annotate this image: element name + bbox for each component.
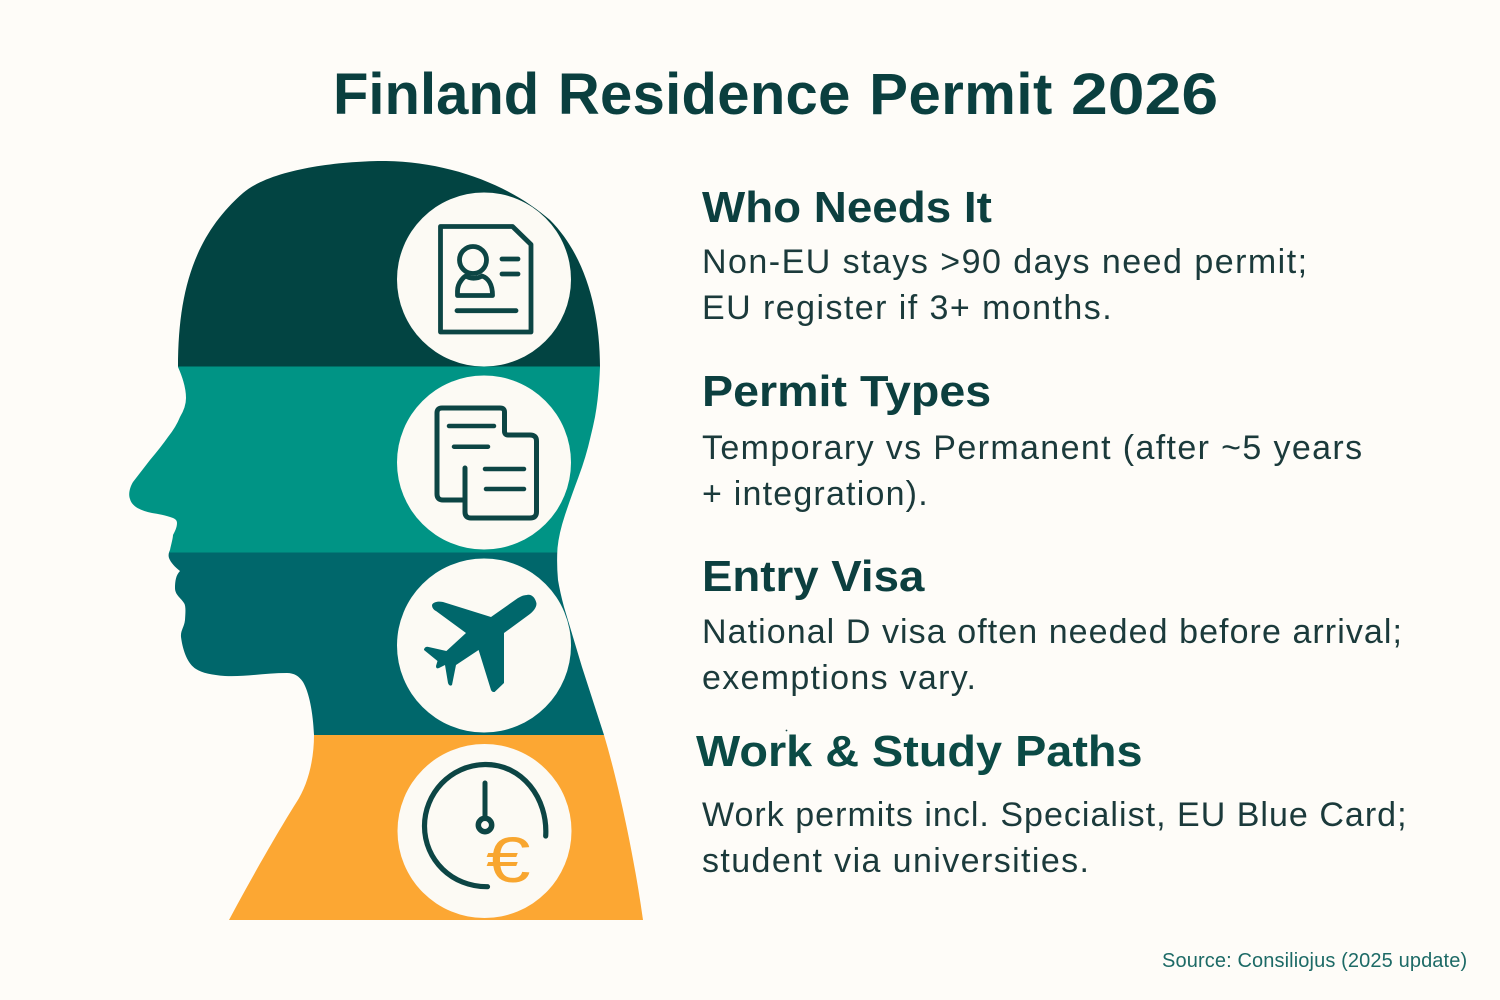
- text: work and study paths: Work permits incl. Specialist, EU Blue Card;: [702, 796, 1408, 834]
- heading: who needs it: Who Needs It: [702, 183, 992, 232]
- section: who needs it: [702, 183, 1309, 327]
- section: entry visa: [702, 552, 1403, 697]
- section: permit types: [702, 367, 1363, 513]
- title: Finland Residence Permit: [333, 62, 1053, 127]
- source note: Source: Consiliojus (2025 update): [1162, 950, 1467, 972]
- icon: stacked documents: [397, 376, 571, 550]
- text: who needs it: [702, 243, 1309, 327]
- text: permit types: Temporary vs Permanent (after ~5 years: [702, 429, 1363, 467]
- title: 2026: [1071, 62, 1219, 127]
- text: who needs it: EU register if 3+ months.: [702, 289, 1113, 327]
- text: entry visa: exemptions vary.: [702, 659, 977, 697]
- icon: clock with euro: [398, 744, 572, 918]
- text: entry visa: National D visa often needed before arrival;: [702, 613, 1403, 651]
- heading: entry visa: Entry Visa: [702, 552, 924, 601]
- text: who needs it: Non-EU stays >90 days need permit;: [702, 243, 1309, 281]
- heading: permit types: Permit Types: [702, 367, 991, 416]
- icon: airplane: [397, 558, 571, 732]
- icon: identity document: [397, 192, 571, 366]
- text: permit types: [702, 429, 1363, 513]
- text: permit types: + integration).: [702, 475, 929, 513]
- head silhouette with icons: [129, 161, 788, 920]
- text: work and study paths: [702, 796, 1408, 880]
- head colour bands: [129, 161, 643, 920]
- heading: work and study paths: Work & Study Paths: [696, 727, 1143, 776]
- icon: clock with euro: €: [486, 825, 531, 896]
- text: entry visa: [702, 613, 1403, 697]
- section: work and study paths: [696, 727, 1408, 880]
- text: work and study paths: student via universities.: [702, 842, 1090, 880]
